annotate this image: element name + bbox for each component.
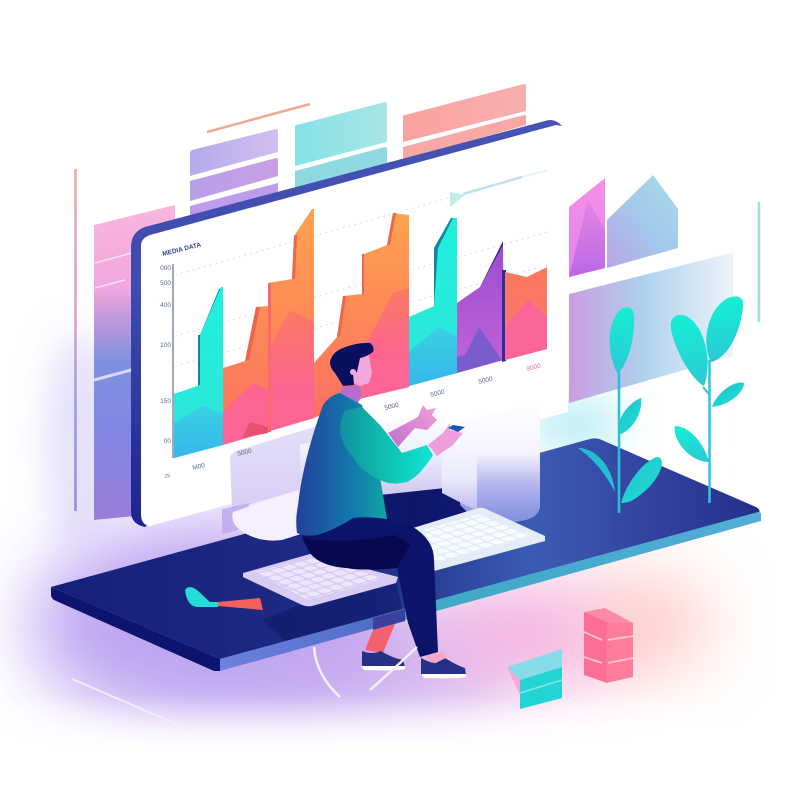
far shoe bbox=[361, 651, 405, 670]
chart x axis and labels bbox=[164, 363, 542, 480]
brush tool bbox=[185, 587, 263, 610]
leaf bbox=[618, 398, 641, 435]
stand: middle panel bbox=[300, 408, 445, 520]
box: pink bbox=[584, 608, 633, 683]
ear bbox=[350, 369, 356, 375]
torso bbox=[296, 393, 387, 536]
series 5: purple bbox=[457, 241, 506, 373]
thigh shade bbox=[302, 535, 410, 570]
face bbox=[352, 355, 372, 386]
series 3: orange and pink bbox=[314, 213, 409, 418]
leaf bbox=[610, 307, 634, 373]
panel: right gradient card bbox=[569, 253, 733, 403]
chart x axis and labels: 5000 bbox=[430, 389, 446, 399]
y axis labels: 00 bbox=[164, 438, 171, 445]
desk bbox=[51, 438, 761, 671]
far arm and hand bbox=[388, 405, 437, 447]
hair bbox=[330, 343, 374, 386]
shadow under person bbox=[262, 580, 402, 641]
monitor frame bbox=[131, 120, 566, 527]
series 2: orange and pink bbox=[223, 209, 314, 445]
leaf bbox=[578, 448, 615, 492]
y axis labels: 400 bbox=[160, 302, 171, 309]
chart x axis and labels: 25 bbox=[164, 473, 171, 480]
ankle bbox=[426, 652, 446, 663]
area chart bbox=[174, 209, 547, 458]
near shoe bbox=[421, 658, 466, 678]
mini chart: magenta peaks bbox=[569, 178, 605, 277]
neck bbox=[338, 385, 362, 405]
y axis labels: 150 bbox=[160, 398, 171, 405]
panel: teal strips bbox=[295, 102, 387, 190]
leaf bbox=[671, 315, 708, 386]
monitor screen bbox=[141, 125, 568, 526]
y axis labels bbox=[160, 265, 171, 445]
plant: left bbox=[578, 307, 662, 513]
stand: foot bbox=[232, 490, 320, 541]
desk top bbox=[51, 438, 760, 659]
near hand bbox=[428, 423, 463, 456]
chart y axis bbox=[160, 264, 173, 458]
far leg bbox=[365, 624, 395, 653]
chart x axis and labels: 5000 bbox=[478, 376, 494, 386]
stand: neck column bbox=[442, 440, 477, 511]
plant: right bbox=[671, 296, 744, 503]
leaf bbox=[621, 457, 662, 503]
cable bbox=[314, 647, 417, 697]
chart x axis and labels: 5000 bbox=[384, 402, 400, 412]
leaf bbox=[675, 426, 709, 462]
monitor shadow on desk bbox=[300, 486, 480, 550]
mini chart: blue house shape bbox=[607, 175, 678, 268]
stand: lilac shade bbox=[222, 503, 250, 534]
panel: salmon strips bbox=[403, 84, 526, 160]
stand: right translucent block bbox=[460, 402, 540, 524]
y axis labels: 000 bbox=[160, 265, 171, 272]
panel: left stacked column bbox=[94, 205, 175, 520]
leaf bbox=[706, 296, 743, 362]
chart x axis and labels: M00 bbox=[192, 462, 206, 472]
box: teal bbox=[507, 649, 562, 709]
leaf bbox=[712, 383, 744, 407]
accent lines bbox=[76, 104, 759, 511]
person bbox=[296, 343, 466, 678]
monitor stand bbox=[222, 402, 540, 541]
phone bbox=[448, 425, 465, 432]
legs bbox=[302, 518, 438, 657]
chart title: MEDIA DATA bbox=[162, 241, 202, 258]
chart grid lines bbox=[175, 170, 548, 366]
series 6: coral and pink bbox=[505, 267, 547, 360]
arrow marker bbox=[450, 171, 545, 207]
keyboard: left bbox=[243, 554, 398, 606]
desk front right edge bbox=[220, 512, 761, 671]
chart x axis and labels: 9000 bbox=[526, 363, 542, 373]
stand: back lavender panel bbox=[230, 425, 320, 509]
keyboard: right bbox=[413, 508, 545, 571]
y axis labels: 100 bbox=[160, 342, 171, 349]
y axis labels: 500 bbox=[160, 280, 171, 287]
chart x axis and labels: 5000 bbox=[237, 448, 253, 458]
series 4: cyan and blue bbox=[409, 218, 457, 386]
near arm bbox=[340, 407, 433, 484]
panel: purple stacked strips bbox=[190, 129, 278, 216]
series 1: cyan bbox=[174, 287, 223, 458]
desk front left edge bbox=[51, 587, 220, 671]
seat underside bbox=[373, 609, 405, 630]
